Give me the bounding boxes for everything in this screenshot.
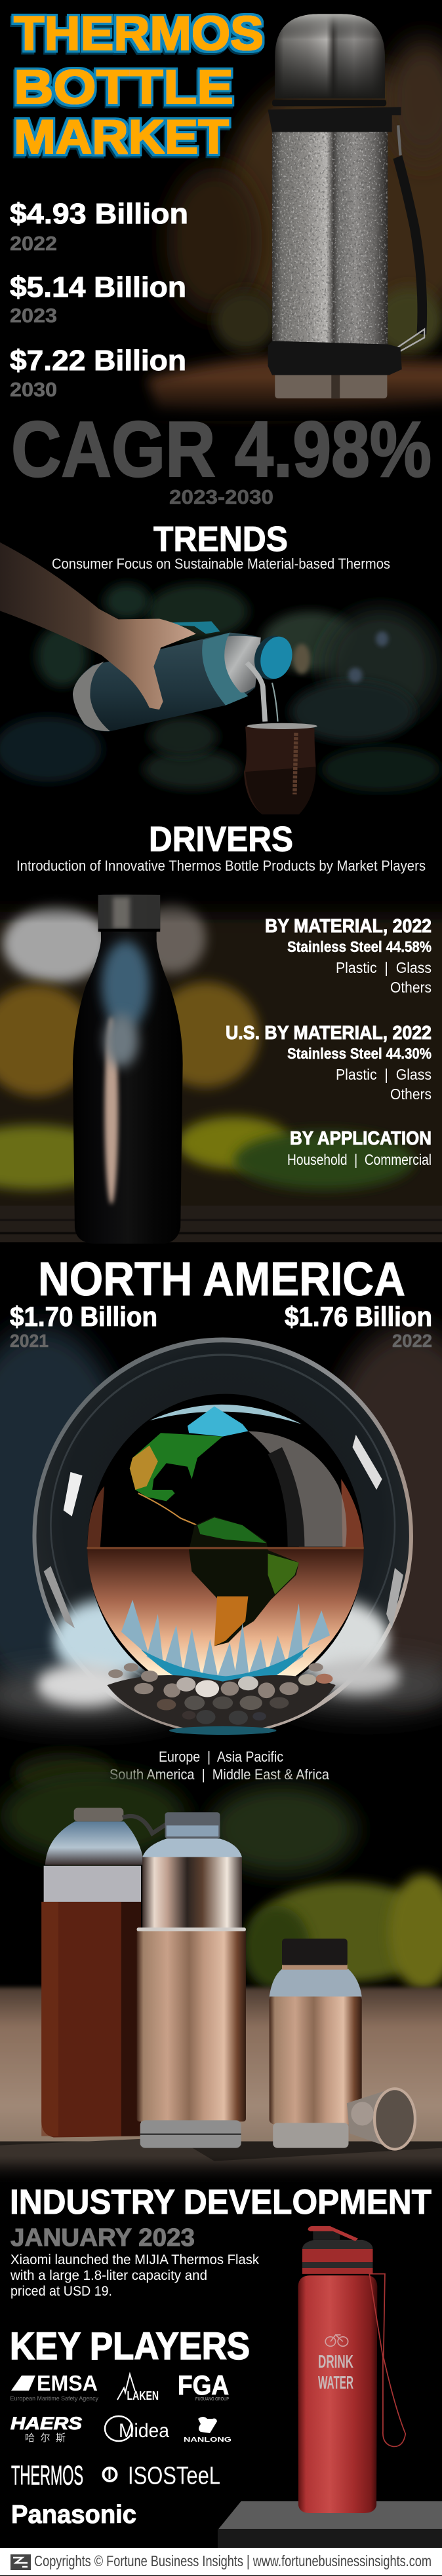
- logo: LAKEN: [117, 2374, 159, 2402]
- segment: by material: BY MATERIAL, 2022: [265, 916, 432, 937]
- illustration: glass pebbles under globe: [107, 1663, 336, 1735]
- logo: Midea: Midea: [119, 2420, 169, 2442]
- stat: 2030 market size: $7.22 Billion: [10, 345, 186, 377]
- logo: LAKEN: LAKEN: [127, 2389, 159, 2402]
- icon: Fortune Business Insights logo: [10, 2554, 31, 2570]
- text: other regions: [110, 1749, 330, 1783]
- text: other regions: South America | Middle East & Africa: [110, 1766, 330, 1783]
- icon: small flask with cup: [270, 1939, 417, 2150]
- logo: EMSA: [10, 2371, 98, 2402]
- segment: by material: [265, 916, 432, 996]
- stat: 2030 market size: [10, 345, 186, 401]
- logo: FGA: FGA: [178, 2370, 229, 2400]
- panel: trends: [0, 520, 442, 860]
- segment: by material: Others: [390, 979, 432, 996]
- stat: 2023 market size: 2023: [10, 304, 57, 327]
- stat: north america 2022: [285, 1301, 432, 1351]
- title: BOTTLE: [14, 61, 233, 114]
- text: date: JANUARY 2023: [10, 2224, 195, 2252]
- text: development description: with a large 1.8-liter capacity and: [10, 2268, 207, 2283]
- logo: HAERS: HAERS: [10, 2414, 82, 2433]
- illustration: hand pouring from thermos into mate gourd: [0, 542, 317, 814]
- background: dark studio gradient: [0, 1327, 442, 1795]
- logo: NANLONG: NANLONG: [184, 2436, 231, 2444]
- heading: north america: NORTH AMERICA: [38, 1253, 405, 1306]
- logo: FGA: FUGUANG GROUP: [195, 2397, 229, 2402]
- heading: drivers: DRIVERS: [149, 820, 293, 859]
- segment: U.S. by material: Plastic | Glass: [336, 1066, 432, 1083]
- stat: 2022 market size: [10, 198, 188, 255]
- stat: north america 2022: $1.76 Billion: [285, 1301, 432, 1332]
- logo: HAERS: 哈尔斯: [25, 2433, 66, 2444]
- text: development description: [10, 2252, 259, 2299]
- background: blurred foliage: [0, 584, 442, 860]
- logo: Isosteel: ISOSTeeL: [128, 2463, 220, 2490]
- logo: EMSA: EMSA: [37, 2371, 98, 2395]
- logo: NANLONG: [184, 2417, 231, 2444]
- segment: by material: Plastic | Glass: [336, 959, 432, 976]
- panel: industry development and key players: [0, 2162, 442, 2548]
- stat: 2030 market size: 2030: [10, 378, 57, 401]
- logo: HAERS: [10, 2414, 82, 2444]
- panel: drivers: [0, 820, 442, 1260]
- stat: 2022 market size: $4.93 Billion: [10, 198, 188, 230]
- stat: CAGR: 2023-2030: [169, 485, 273, 508]
- text: other regions: Europe | Asia Pacific: [159, 1749, 283, 1765]
- icon: red water bottle: [298, 2226, 405, 2513]
- text: bottle engraving: WATER: [318, 2372, 353, 2393]
- stat: north america 2021: $1.70 Billion: [10, 1301, 157, 1332]
- panel: market overview: [0, 7, 442, 508]
- icon: flask with leather sleeve: [41, 1808, 167, 2138]
- segment: by application: [287, 1128, 432, 1168]
- logo: Midea: [105, 2416, 169, 2442]
- logo: Isosteel: [104, 2463, 220, 2490]
- stat: 2023 market size: $5.14 Billion: [10, 271, 186, 303]
- title: MARKET: [14, 111, 229, 164]
- icon: tall steel flask: [137, 1812, 246, 2148]
- text: trend description: Consumer Focus on Sustainable Material-based Thermos: [52, 556, 390, 572]
- background: garden and ground: [0, 1771, 442, 2182]
- text: development description: priced at USD 19.: [10, 2284, 112, 2299]
- stat: north america 2021: [10, 1301, 157, 1351]
- segment: U.S. by material: [226, 1023, 432, 1103]
- icon: black bottle: [73, 894, 183, 1243]
- logo: EMSA: European Maritime Safety Agency: [10, 2395, 98, 2402]
- heading: key players: KEY PLAYERS: [10, 2325, 250, 2368]
- background: blurred landscape: [0, 882, 442, 1260]
- stat: 2023 market size: [10, 271, 186, 327]
- title: THERMOS: [14, 7, 264, 60]
- text: bottle engraving: [318, 2351, 353, 2393]
- illustration: glass globe: [34, 1340, 411, 1732]
- background: fade to black: [0, 2162, 442, 2195]
- stat: north america 2021: 2021: [10, 1331, 49, 1351]
- segment: U.S. by material: Others: [390, 1086, 432, 1103]
- stat: north america 2022: 2022: [392, 1331, 432, 1351]
- stat: 2022 market size: 2022: [10, 232, 57, 255]
- title: [14, 7, 264, 164]
- panel: regional insights: [0, 1253, 442, 1795]
- illustration: marble table: [218, 2501, 442, 2548]
- heading: trends: TRENDS: [153, 520, 288, 559]
- icon: stainless steel thermos with water droplets: [268, 14, 424, 398]
- text: bottle engraving: DRINK: [318, 2351, 353, 2372]
- background: blurred forest and tree stump: [0, 40, 442, 421]
- panel: product photo of three flasks: [0, 1771, 442, 2182]
- text: development description: Xiaomi launched the MIJIA Thermos Flask: [10, 2252, 259, 2267]
- logo: Panasonic: Panasonic: [11, 2501, 136, 2529]
- footer: [0, 2548, 442, 2575]
- logo: THERMOS: THERMOS: [11, 2459, 83, 2491]
